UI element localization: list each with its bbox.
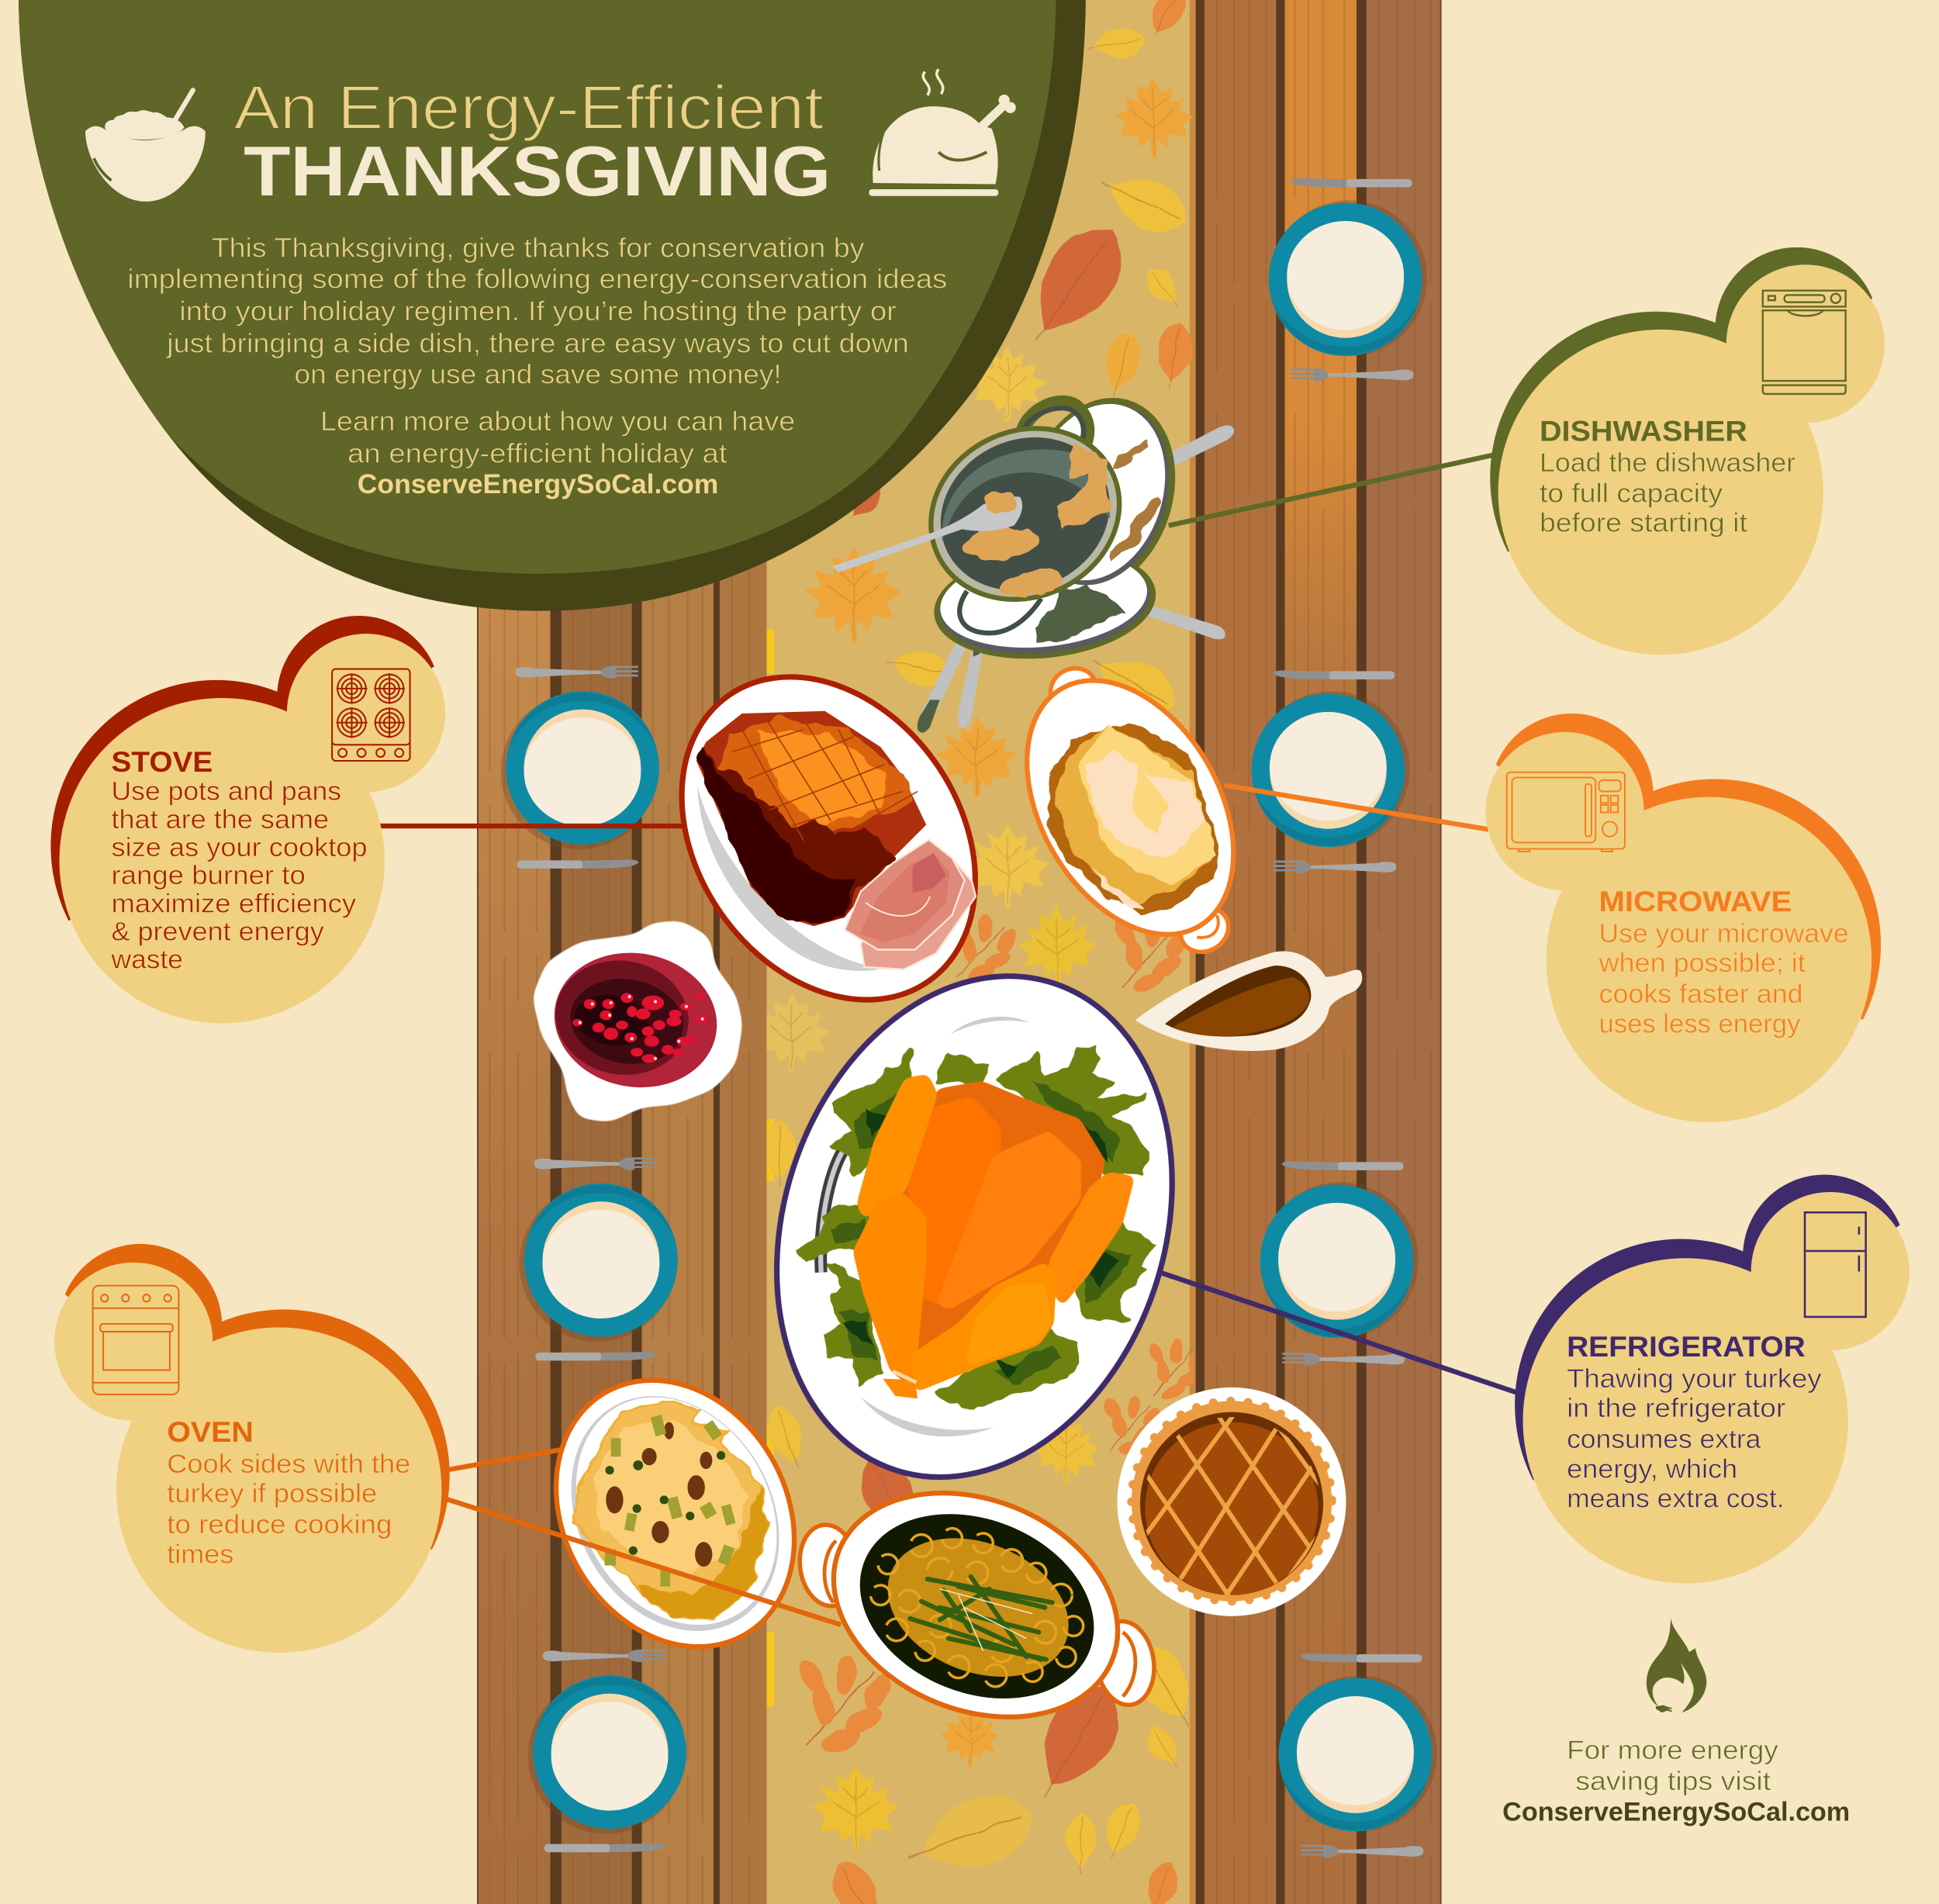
place settings left column [501, 666, 686, 1852]
text: refrigerator tip: Thawing your turkey [1567, 1364, 1822, 1394]
place setting: right 1 [1269, 178, 1427, 381]
microwave bubble [1485, 714, 1881, 1122]
text: refrigerator tip: in the refrigerator [1567, 1394, 1785, 1423]
casserole handles [1042, 660, 1236, 960]
footer text [1567, 1736, 1779, 1796]
text: oven tip: to reduce cooking [167, 1510, 392, 1539]
text: microwave tip: when possible; it [1598, 949, 1806, 978]
stuffing plate [509, 1337, 842, 1690]
text: microwave tip: cooks faster and [1599, 980, 1803, 1009]
wooden table [477, 0, 1442, 1904]
mashed potatoes [1047, 722, 1221, 914]
platter shading [697, 786, 884, 971]
intro text: This Thanksgiving, give thanks for conservation by [212, 233, 865, 264]
roast turkey [855, 1077, 1132, 1398]
place setting: right 2 [1252, 670, 1410, 873]
intro text: into your holiday regimen. If you’re hosting the party or [179, 296, 897, 327]
text: stove tip: that are the same [112, 805, 329, 835]
dish: glazed ham on platter [621, 620, 1036, 1056]
footer text: For more energy [1567, 1736, 1779, 1765]
icon: flame with plug [1647, 1617, 1706, 1712]
cranberries [572, 993, 707, 1063]
place setting: left middle [520, 1157, 678, 1360]
stove bubble [50, 616, 445, 1023]
ham roast [696, 711, 926, 926]
dish: stuffing on plate [509, 1337, 842, 1690]
learn more text: Learn more about how you can have [320, 406, 795, 437]
cranberry plate [537, 925, 738, 1118]
turkey platter [714, 924, 1235, 1529]
table runner with autumn leaves [752, 0, 1209, 1904]
website link: ConserveEnergySoCal.com [358, 469, 718, 499]
text: stove tip: waste [110, 945, 183, 974]
text: stove tip: size as your cooktop [112, 833, 368, 862]
heading: stove: STOVE [112, 746, 213, 778]
footer website: ConserveEnergySoCal.com [1502, 1798, 1850, 1827]
icon: microwave [1507, 772, 1625, 852]
text: refrigerator tip [1567, 1364, 1822, 1514]
pie filling [1145, 1422, 1319, 1595]
heading: dishwasher: DISHWASHER [1540, 415, 1747, 447]
text: stove tip: maximize efficiency [112, 890, 357, 919]
lettuce garnish [797, 1047, 1154, 1408]
intro text: on energy use and save some money! [294, 359, 782, 389]
icon: roast turkey [869, 69, 1016, 196]
casserole dish interior [832, 1481, 1122, 1732]
text: microwave tip: Use your microwave [1599, 919, 1849, 949]
icon: refrigerator [1805, 1212, 1866, 1317]
casserole handles [795, 1521, 1160, 1709]
footer text: saving tips visit [1575, 1767, 1771, 1796]
place setting: left bottom [528, 1650, 686, 1852]
connector line: oven to side dishes [445, 1498, 841, 1625]
heading: refrigerator: REFRIGERATOR [1567, 1331, 1806, 1363]
dirty dishes pile [832, 378, 1234, 733]
plate rim [530, 1358, 821, 1669]
icon: stove [332, 669, 410, 761]
panel: stove callout [50, 616, 445, 1023]
serving fork [821, 1150, 843, 1273]
text: stove tip: Use pots and pans [112, 777, 341, 807]
ham platter [621, 620, 1036, 1056]
header main shape [19, 0, 1056, 574]
heading: microwave: MICROWAVE [1599, 886, 1792, 917]
title line two: THANKSGIVING [244, 133, 831, 211]
text: stove tip: & prevent energy [112, 917, 325, 947]
text: oven tip: turkey if possible [167, 1479, 377, 1508]
text: dishwasher tip [1540, 448, 1796, 538]
text: dishwasher tip: to full capacity [1540, 479, 1723, 508]
place setting: right 3 [1260, 1161, 1419, 1365]
text: microwave tip [1598, 919, 1849, 1038]
title line one: An Energy-Efficient [233, 73, 824, 142]
ham slices [845, 840, 976, 969]
panel: header [19, 0, 1086, 611]
casserole body [984, 644, 1276, 971]
dish: cranberry sauce [537, 925, 738, 1118]
platter shading [859, 1017, 1029, 1436]
dish: gravy boat [1135, 951, 1362, 1051]
text: dishwasher tip: before starting it [1540, 509, 1747, 538]
stuffing [574, 1401, 769, 1619]
header shadow shape [19, 0, 1086, 611]
place settings right column [1252, 178, 1437, 1857]
cranberry dish [544, 940, 728, 1100]
text: refrigerator tip: consumes extra [1567, 1425, 1761, 1454]
panel: refrigerator callout [1515, 1175, 1910, 1584]
text: stove tip: range burner to [112, 861, 306, 890]
fried onions [867, 1512, 1090, 1702]
learn more text: an energy-efficient holiday at [347, 438, 728, 468]
plates with food scraps [928, 378, 1199, 669]
pot with handles [900, 395, 1151, 633]
intro text: just bringing a side dish, there are easy ways to cut down [166, 328, 909, 358]
icon: oven [93, 1286, 178, 1394]
pie plate [1118, 1387, 1346, 1616]
pie crust [1132, 1401, 1332, 1602]
intro text: implementing some of the following energy-conservation ideas [127, 264, 947, 294]
casserole body [800, 1453, 1152, 1757]
lattice [1138, 1398, 1342, 1608]
panel: oven callout [54, 1244, 450, 1653]
dish: apple pie [1118, 1387, 1346, 1616]
place setting: left top [501, 666, 659, 869]
text: stove tip [110, 777, 368, 974]
icon: bowl of mashed potatoes [85, 90, 206, 202]
icon: dishwasher [1763, 291, 1846, 394]
refrigerator bubble [1515, 1175, 1910, 1584]
green beans [910, 1577, 1052, 1660]
dish: mashed potatoes casserole [984, 644, 1276, 971]
learn more text [320, 406, 795, 468]
text: refrigerator tip: energy, which [1567, 1454, 1737, 1484]
text: refrigerator tip: means extra cost. [1567, 1484, 1785, 1514]
oven bubble [54, 1244, 450, 1653]
text: oven tip: times [167, 1539, 233, 1569]
connector lines from callouts to dishes [378, 454, 1523, 1470]
text: microwave tip: uses less energy [1599, 1009, 1801, 1038]
heading: oven: OVEN [167, 1416, 254, 1448]
dish: turkey platter [714, 924, 1235, 1529]
intro text [127, 233, 947, 389]
panel: dishwasher callout [1490, 247, 1885, 655]
spoon [832, 491, 1022, 572]
text: oven tip [167, 1450, 410, 1569]
text: oven tip: Cook sides with the [167, 1450, 410, 1479]
dishwasher bubble [1490, 247, 1885, 655]
dish: green bean casserole [795, 1453, 1160, 1757]
footer [1502, 1617, 1850, 1827]
place setting: right 4 [1279, 1653, 1437, 1857]
panel: microwave callout [1485, 714, 1881, 1122]
utensils under the pot [918, 425, 1234, 733]
text: dishwasher tip: Load the dishwasher [1540, 448, 1796, 478]
